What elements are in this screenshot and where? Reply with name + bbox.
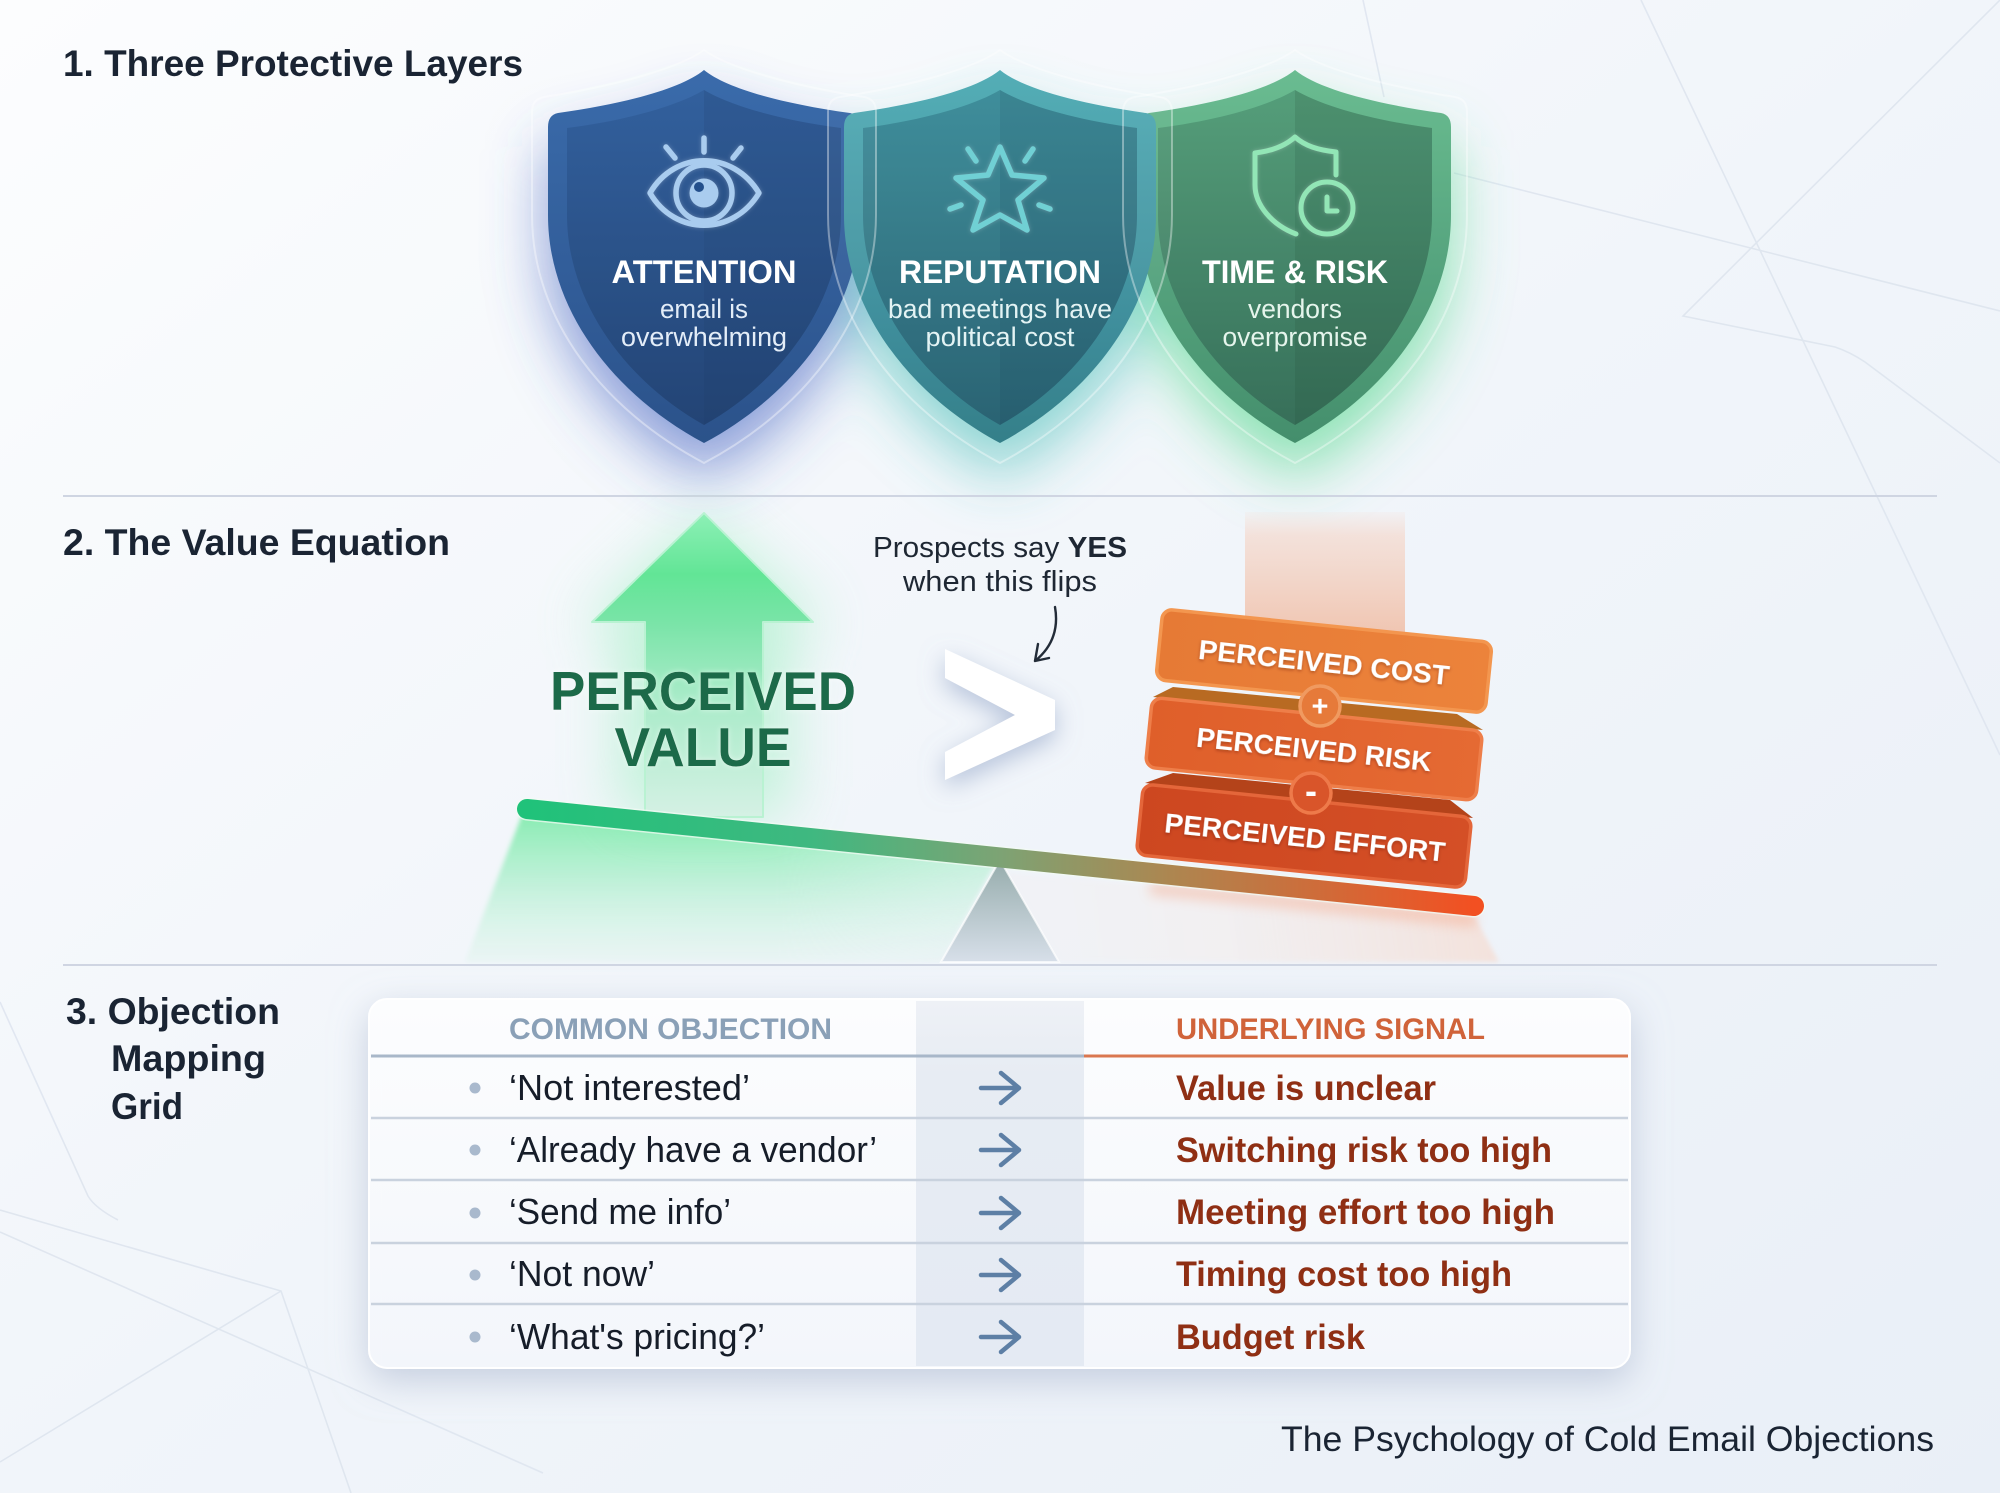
fulcrum [941, 860, 1059, 962]
label: perceived cost: PERCEIVED COST [1197, 634, 1451, 691]
header: common objection: COMMON OBJECTION [509, 1013, 832, 1046]
operator: minus [1291, 770, 1331, 813]
heading: section 3: Mapping [111, 1038, 266, 1079]
operator: minus: - [1305, 770, 1317, 811]
heading: section 1: 1. Three Protective Layers [63, 43, 523, 84]
footer title: The Psychology of Cold Email Objections [1281, 1420, 1934, 1459]
table card [369, 999, 1630, 1368]
arrow: callout pointer [1035, 607, 1056, 661]
block: perceived effort [1136, 784, 1472, 888]
signals column: Switching risk too high [1176, 1131, 1552, 1170]
beam underglow [1150, 888, 1476, 920]
text: attention: ATTENTION [612, 254, 796, 290]
signals column: Budget risk [1176, 1318, 1366, 1357]
red rising column [1245, 512, 1405, 662]
panel: objection mapping table [369, 999, 1630, 1368]
text: time and risk [1202, 254, 1388, 352]
objections column [509, 1067, 877, 1357]
operator: plus [1300, 686, 1340, 726]
callout: prospects say yes [873, 532, 1127, 598]
perceived value label: PERCEIVED [550, 660, 856, 722]
arrow column [916, 1001, 1084, 1366]
shield: reputation [844, 70, 1156, 443]
ghost shield outlines [532, 50, 1467, 463]
block connectors [1145, 773, 1473, 818]
text: reputation: bad meetings have [888, 294, 1112, 324]
seesaw beam [527, 809, 1474, 906]
text: time and risk: overpromise [1222, 322, 1368, 352]
heading: section 3: 3. Objection [66, 991, 280, 1032]
red light beam [1005, 872, 1499, 962]
text: attention [612, 254, 796, 352]
signals column: Timing cost too high [1176, 1255, 1512, 1294]
green arrow up [578, 513, 830, 817]
icon: star [950, 147, 1050, 230]
stack of cost blocks [1136, 609, 1492, 888]
seesaw beam halo [527, 809, 1474, 906]
text: reputation: REPUTATION [899, 254, 1101, 290]
text: reputation [888, 254, 1112, 352]
green light beam [465, 815, 996, 962]
callout: prospects say yes: Prospects say YES [873, 532, 1127, 564]
objections column: ‘Not interested’ [509, 1067, 750, 1108]
block: perceived risk [1145, 697, 1483, 801]
greater than sign [945, 649, 1055, 780]
heading: section 3 [66, 991, 280, 1127]
objections column: ‘Not now’ [509, 1253, 655, 1294]
text: reputation: political cost [926, 322, 1075, 352]
label: perceived effort: PERCEIVED EFFORT [1163, 807, 1447, 868]
text: time and risk: vendors [1248, 294, 1342, 324]
text: attention: overwhelming [621, 322, 787, 352]
signals column [1176, 1069, 1555, 1357]
text: time and risk: TIME & RISK [1202, 254, 1388, 290]
mapping arrows [981, 1073, 1019, 1352]
callout: prospects say yes: when this flips [902, 566, 1097, 598]
block: perceived cost [1156, 609, 1492, 713]
icon: eye [650, 138, 759, 225]
bullets [470, 1082, 480, 1342]
panel: three protective shields [532, 50, 1467, 477]
perceived value label [550, 660, 856, 778]
objections column: ‘Send me info’ [509, 1191, 731, 1232]
heading: section 3: Grid [111, 1086, 183, 1127]
shield: attention [548, 70, 860, 443]
header: underlying signal: UNDERLYING SIGNAL [1176, 1013, 1485, 1046]
shield: time and risk [1139, 70, 1451, 443]
signals column: Meeting effort too high [1176, 1193, 1555, 1232]
perceived value label: VALUE [614, 716, 792, 778]
objections column: ‘What's pricing?’ [509, 1316, 765, 1357]
operator: plus: + [1312, 691, 1328, 723]
heading: section 2: 2. The Value Equation [63, 522, 450, 563]
label: perceived risk: PERCEIVED RISK [1195, 722, 1433, 777]
objections column: ‘Already have a vendor’ [509, 1129, 877, 1170]
icon: shield with clock [1255, 137, 1353, 234]
panel: value equation seesaw [465, 512, 1499, 962]
signals column: Value is unclear [1176, 1069, 1436, 1108]
text: attention: email is [660, 294, 748, 324]
